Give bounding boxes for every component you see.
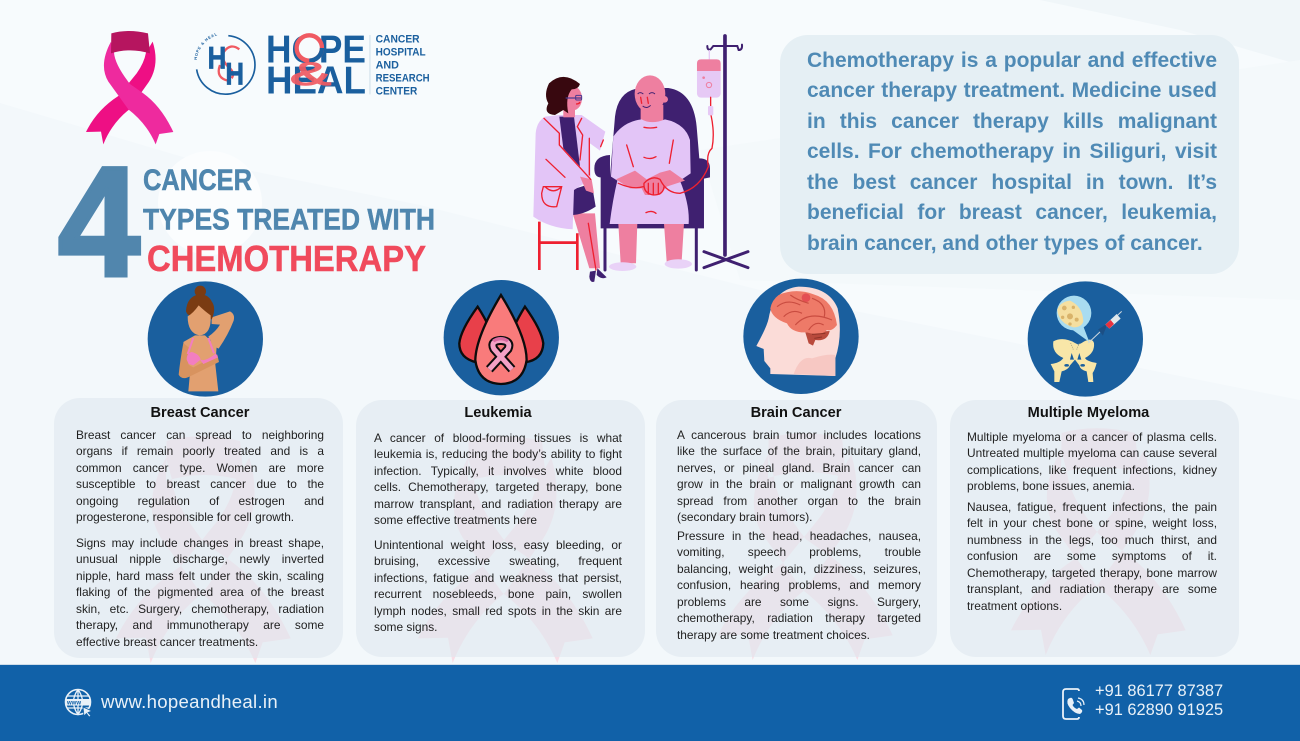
logo: CENTER — [376, 85, 418, 97]
icon: breast self-exam — [148, 281, 263, 397]
logo: HOPE — [266, 29, 366, 72]
text: brain cancer signs: vomiting, speech problems, trouble — [677, 545, 921, 559]
title: CANCER — [143, 164, 252, 197]
intro text: cancer therapy treatment. Medicine used — [807, 79, 1217, 102]
text: breast cancer signs: effective breast cancer treatments. — [76, 635, 258, 649]
text: leukemia overview: leukemia is, reducing the body’s ability to fight — [374, 447, 622, 461]
logo: H — [208, 40, 226, 75]
logo: CANCER — [376, 34, 420, 46]
text: leukemia signs: Unintentional weight loss, easy bleeding, or — [374, 538, 622, 552]
text: leukemia overview: marrow transplant, and radiation therapy are — [374, 497, 622, 511]
logo — [194, 29, 430, 102]
intro text: Chemotherapy is a popular and effective — [807, 48, 1217, 72]
text: multiple myeloma symptoms: Chemotherapy, targeted therapy, bone marrow — [967, 566, 1217, 580]
text: multiple myeloma symptoms — [967, 500, 1217, 613]
phone numbers: +91 62890 91925 — [1095, 701, 1223, 719]
text: brain cancer overview: spread from another organ to the brain — [677, 494, 921, 508]
text: multiple myeloma symptoms: felt in your chest bone or spine, weight loss, — [967, 516, 1217, 530]
icon: pelvis bone marrow and syringe — [1028, 281, 1143, 397]
text: leukemia signs: some signs. — [374, 620, 437, 634]
text: breast cancer overview: susceptible to breast cancer due to the — [76, 477, 324, 491]
panel: chemotherapy intro — [780, 35, 1239, 274]
text: multiple myeloma overview: complications, like frequent infections, kidney — [967, 463, 1217, 477]
phone numbers: +91 86177 87387 — [1095, 682, 1223, 700]
text: breast cancer overview: Breast cancer can spread to neighboring — [76, 428, 324, 442]
text: breast cancer overview: organs if remain poorly treated and is a — [76, 444, 324, 458]
intro text: brain cancer, and other types of cancer. — [807, 232, 1203, 254]
text: multiple myeloma overview: Multiple myeloma or a cancer of plasma cells. — [967, 430, 1217, 444]
intro text — [807, 48, 1217, 254]
intro text: cells. For chemotherapy in Siliguri, visit — [807, 140, 1217, 163]
logo: & — [288, 55, 333, 93]
text: breast cancer signs: Signs may include changes in breast shape, — [76, 536, 324, 550]
text: leukemia signs: infections, fatigue and weakness that persist, — [374, 571, 622, 585]
text: breast cancer signs: unusual nipple discharge, newly inverted — [76, 552, 324, 566]
footer bar — [0, 665, 1300, 741]
text: leukemia signs: lymph nodes, small red spots in the skin are — [374, 604, 622, 618]
phone numbers — [1095, 682, 1223, 719]
text: brain cancer signs: Pressure in the head, headaches, nausea, — [677, 529, 921, 543]
intro text: beneficial for breast cancer, leukemia, — [807, 201, 1217, 224]
text: multiple myeloma symptoms: Nausea, fatigue, frequent infections, the pain — [967, 500, 1217, 514]
text: multiple myeloma overview — [967, 430, 1217, 493]
panel: leukemia — [356, 400, 645, 657]
heading: breast cancer: Breast Cancer — [151, 405, 249, 421]
text: multiple myeloma symptoms: confusion are some symptoms of it. — [967, 549, 1217, 563]
text: breast cancer signs — [76, 536, 324, 649]
intro text: the best cancer hospital in town. It’s — [807, 170, 1217, 194]
icon: brain in head profile — [743, 278, 859, 394]
text: multiple myeloma symptoms: treatment options. — [967, 599, 1062, 613]
text: breast cancer signs: nipple, hard mass felt under the skin, scaling — [76, 569, 324, 583]
text: brain cancer overview: nerves, or pineal gland. Brain cancer can — [677, 461, 921, 475]
icon: globe: www — [66, 700, 81, 706]
text: breast cancer overview: ongoing regulation of estrogen and — [76, 494, 324, 508]
text: brain cancer signs: problems are some signs. Surgery, — [677, 595, 921, 609]
panel: multiple myeloma — [950, 400, 1239, 657]
text: brain cancer overview: like the surface of the brain, pituitary gland, — [677, 444, 921, 458]
logo: HEAL — [266, 59, 366, 102]
text: leukemia overview: cells. Chemotherapy, targeted therapy, bone — [374, 480, 622, 494]
text: brain cancer signs: chemotherapy, radiation therapy targeted — [677, 611, 921, 625]
illustration: doctor and patient with IV drip — [533, 34, 750, 282]
logo: AND — [376, 60, 399, 72]
text: leukemia overview: infection. Typically, it involves white blood — [374, 464, 622, 478]
panel: brain cancer — [656, 400, 937, 657]
text: breast cancer signs: flaking of the pigmented area of the breast — [76, 585, 324, 599]
text: breast cancer overview: progesterone, responsible for cell growth. — [76, 510, 294, 524]
title — [58, 136, 435, 300]
text: breast cancer overview: common cancer type. Women are more — [76, 461, 324, 475]
text: breast cancer signs: skin, etc. Surgery, chemotherapy, radiation — [76, 602, 324, 616]
heading: leukemia: Leukemia — [464, 405, 532, 421]
text: brain cancer signs: balancing, weight gain, dizziness, seizures, — [677, 562, 921, 576]
logo: H — [225, 56, 244, 91]
text: multiple myeloma symptoms: numbness in the legs, too much thirst, and — [967, 533, 1217, 547]
panel: breast cancer — [54, 398, 343, 658]
title: CHEMOTHERAPY — [147, 238, 426, 279]
text: leukemia signs: bruising, excessive sweating, frequent — [374, 554, 622, 568]
text: multiple myeloma overview: problems, bone issues, anemia. — [967, 479, 1135, 493]
text: breast cancer signs: therapy, and immunotherapy are some — [76, 618, 324, 632]
text: leukemia overview: A cancer of blood-forming tissues is what — [374, 431, 622, 445]
icon: phone — [1062, 688, 1085, 720]
logo: HOSPITAL — [376, 47, 426, 59]
text: leukemia signs — [374, 538, 622, 634]
text: leukemia overview — [374, 431, 622, 527]
text: brain cancer signs — [677, 529, 921, 642]
logo: HOPE & HEAL — [194, 33, 218, 60]
heading: multiple myeloma: Multiple Myeloma — [1028, 405, 1149, 421]
text: brain cancer overview: grow in the brain or malignant growth can — [677, 477, 921, 491]
text: leukemia overview: some effective treatments here — [374, 513, 537, 527]
text: multiple myeloma overview: Untreated multiple myeloma can cause several — [967, 446, 1217, 460]
text: leukemia signs: recurrent nosebleeds, bone pain, swollen — [374, 587, 622, 601]
text: brain cancer signs: confusion, hearing problems, and memory — [677, 578, 921, 592]
heading: brain cancer: Brain Cancer — [751, 405, 841, 421]
icon: globe — [64, 688, 92, 716]
intro text: in this cancer therapy kills malignant — [807, 110, 1217, 132]
text: brain cancer signs: therapy are some treatment choices. — [677, 628, 870, 642]
text: brain cancer overview: A cancerous brain tumor includes locations — [677, 428, 921, 442]
website: www.hopeandheal.in — [101, 691, 278, 712]
pink ribbon — [86, 31, 174, 144]
text: multiple myeloma symptoms: transplant, and radiation therapy are some — [967, 582, 1217, 596]
icon: blood drops with ribbon — [444, 280, 559, 396]
logo: RESEARCH — [376, 73, 430, 85]
text: brain cancer overview: (secondary brain tumors). — [677, 510, 812, 524]
text: brain cancer overview — [677, 428, 921, 524]
text: breast cancer overview — [76, 428, 324, 524]
